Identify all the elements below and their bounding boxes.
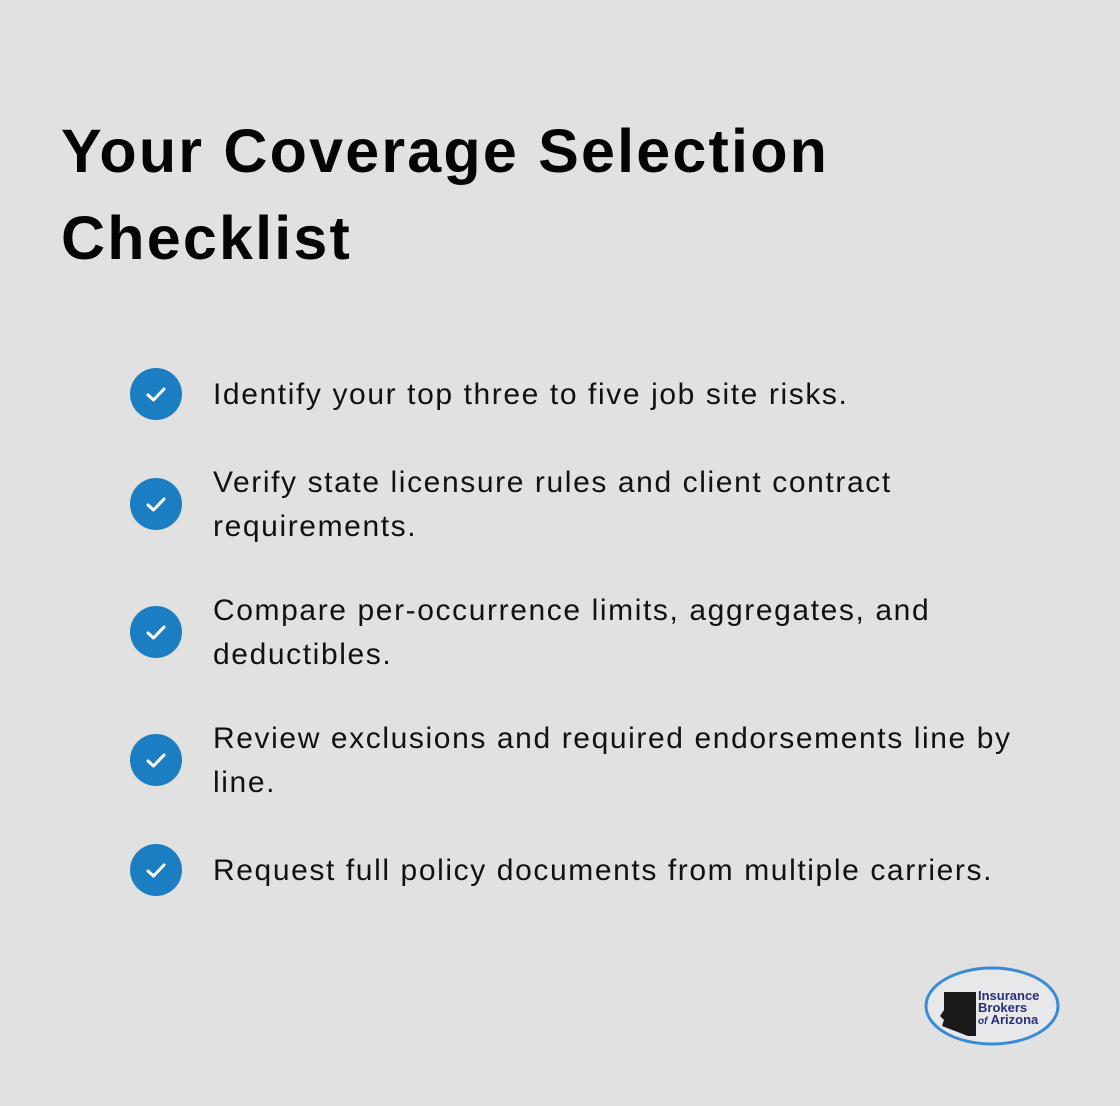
logo: Insurance <box>978 988 1039 1003</box>
checklist item 3 <box>130 594 930 671</box>
checklist item 4: line. <box>213 766 276 799</box>
logo: Brokers <box>978 1000 1027 1015</box>
checklist item 3: deductibles. <box>213 638 392 671</box>
icon: check <box>130 734 182 786</box>
title <box>61 117 829 272</box>
checklist item 3: Compare per-occurrence limits, aggregates, and <box>213 594 930 627</box>
logo: of Arizona <box>978 1012 1039 1027</box>
checklist item 4 <box>130 722 1012 799</box>
checklist item 5: Request full policy documents from multiple carriers. <box>213 854 993 887</box>
checklist item 5 <box>130 844 993 896</box>
checklist item 2: requirements. <box>213 510 417 543</box>
icon: check <box>130 478 182 530</box>
title: Your Coverage Selection <box>61 117 829 185</box>
logo <box>924 966 1060 1046</box>
icon: check <box>130 368 182 420</box>
title: Checklist <box>61 204 352 272</box>
icon: check <box>130 844 182 896</box>
checklist item 4: Review exclusions and required endorsements line by <box>213 722 1012 755</box>
checklist item 1 <box>130 368 848 420</box>
checklist item 2 <box>130 466 892 543</box>
checklist item 2: Verify state licensure rules and client contract <box>213 466 892 499</box>
icon: check <box>130 606 182 658</box>
checklist item 1: Identify your top three to five job site risks. <box>213 378 848 411</box>
